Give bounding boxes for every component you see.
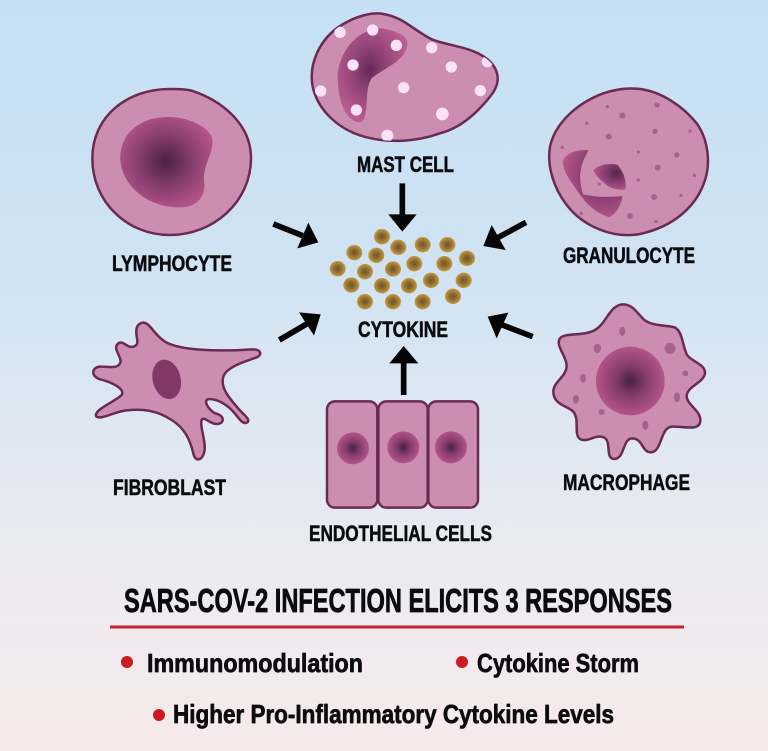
heading underline xyxy=(110,626,684,628)
label: cytokine: CYTOKINE xyxy=(358,317,448,342)
fibroblast xyxy=(93,323,260,500)
arrow: from fibroblast xyxy=(279,312,321,340)
lymphocyte body xyxy=(92,89,251,235)
label: lymphocyte: LYMPHOCYTE xyxy=(112,251,232,276)
arrow: from lymphocyte xyxy=(273,223,318,248)
arrow: from endothelial cells xyxy=(389,346,418,395)
endothelial cell row xyxy=(327,401,478,508)
macrophage body xyxy=(553,304,705,459)
response: higher pro-inflammatory cytokine levels: Higher Pro-Inflammatory Cytokine Levels xyxy=(173,699,614,729)
granulocyte body xyxy=(549,89,708,235)
cytokine particles xyxy=(330,229,475,309)
arrow: from mast cell xyxy=(388,183,417,232)
response: immunomodulation: Immunomodulation xyxy=(147,648,363,678)
label: macrophage: MACROPHAGE xyxy=(563,470,690,495)
mast cell body xyxy=(312,13,498,142)
fibroblast body xyxy=(93,323,260,459)
arrow: from macrophage xyxy=(488,313,533,338)
arrow: from granulocyte xyxy=(483,222,526,250)
label: endothelial cells: ENDOTHELIAL CELLS xyxy=(309,521,492,546)
label: granulocyte: GRANULOCYTE xyxy=(563,243,695,268)
mast cell xyxy=(312,13,498,177)
response: cytokine storm: Cytokine Storm xyxy=(477,648,639,678)
lymphocyte xyxy=(92,89,251,276)
cytokine cluster xyxy=(330,229,475,342)
label: fibroblast: FIBROBLAST xyxy=(113,475,226,500)
label: mast cell: MAST CELL xyxy=(357,152,454,177)
endothelial cells xyxy=(309,401,492,546)
macrophage xyxy=(553,304,705,495)
granulocyte xyxy=(549,89,708,268)
arrows toward cytokine xyxy=(273,183,533,395)
